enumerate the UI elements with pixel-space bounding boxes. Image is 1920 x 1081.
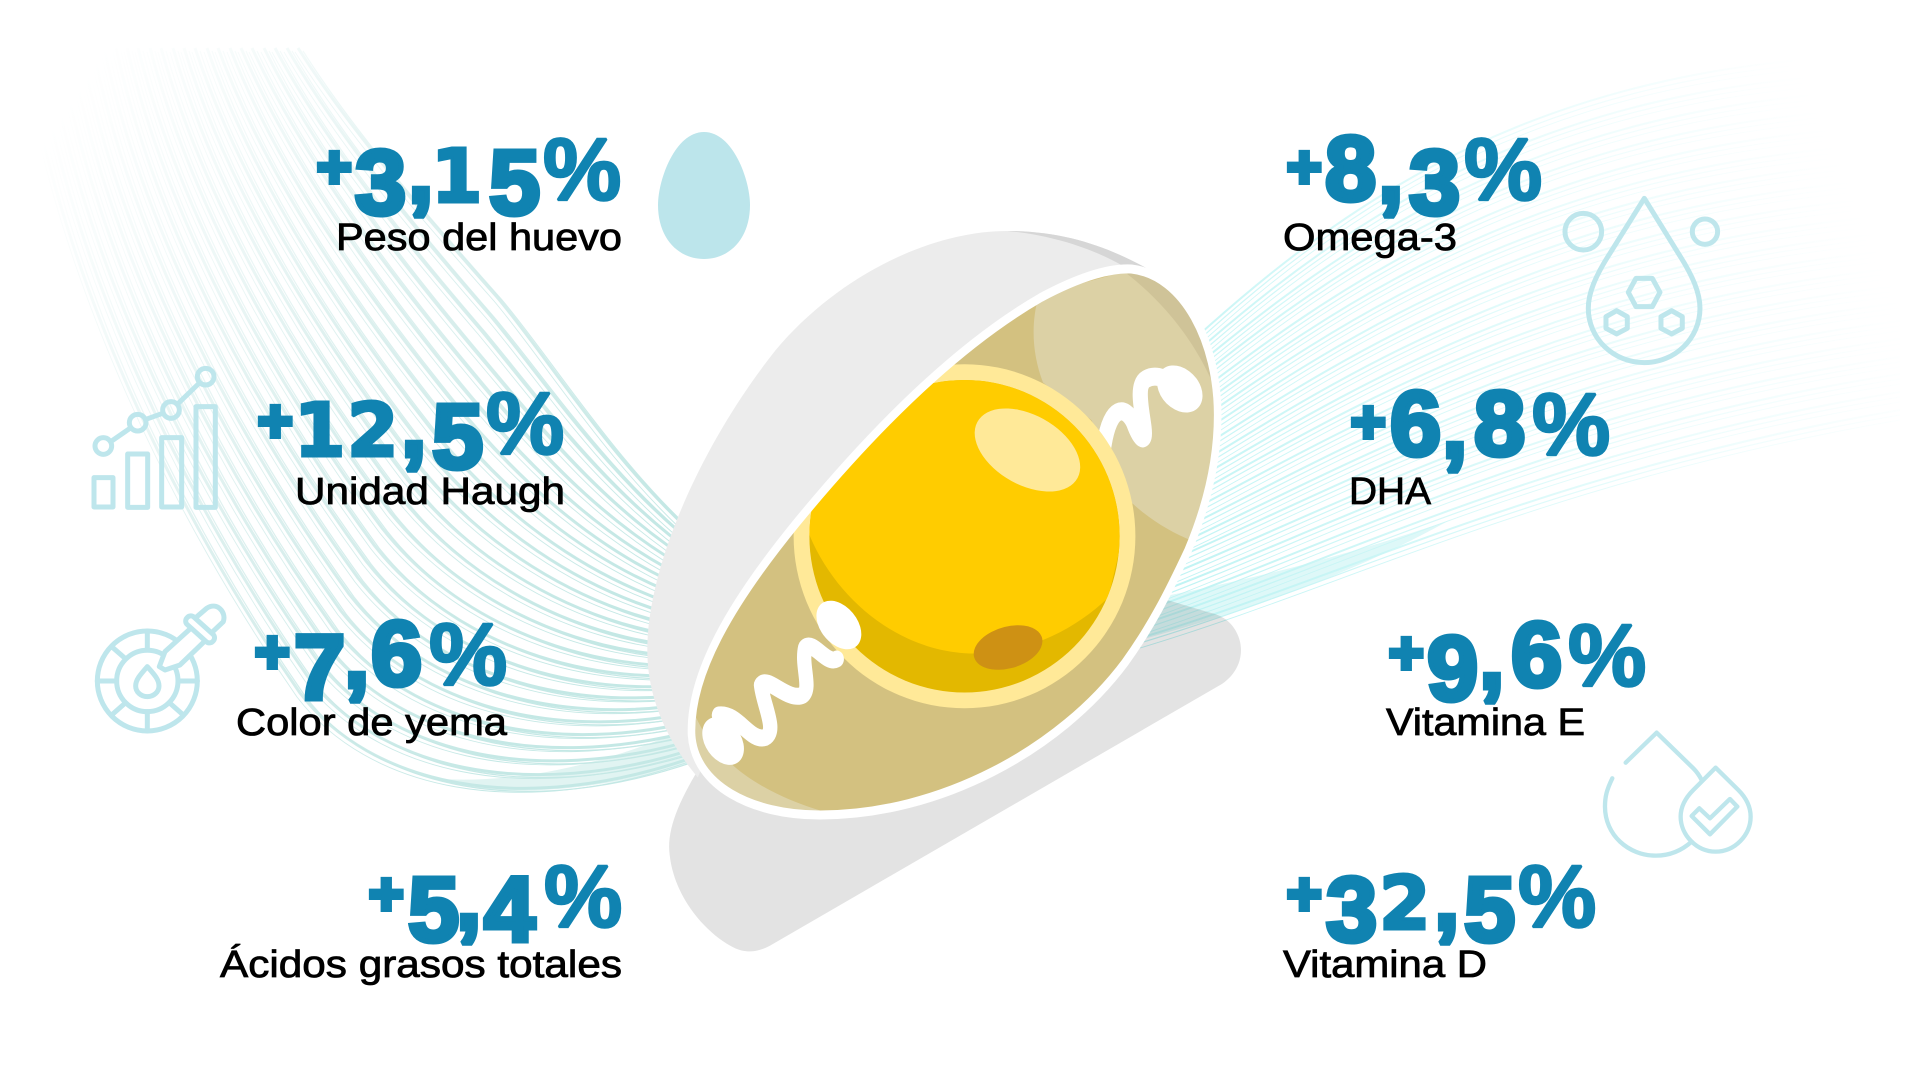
stat: yolk colour: , xyxy=(344,605,370,707)
stat: vitamin E: Vitamina E xyxy=(1386,702,1585,744)
stat: egg weight: Peso del huevo xyxy=(336,217,622,259)
stat: Haugh unit: 1 xyxy=(294,388,346,474)
stat: vitamin E: + xyxy=(1387,625,1426,679)
icon: double drop with check xyxy=(1605,733,1751,856)
stat: Haugh unit: % xyxy=(486,374,564,473)
stat: vitamin D: 3 xyxy=(1326,859,1377,961)
stat: Haugh unit xyxy=(256,374,565,513)
stat: vitamin E: 9 xyxy=(1427,618,1478,720)
stat: Haugh unit: 2 xyxy=(347,388,398,474)
stat: egg weight: , xyxy=(408,120,434,222)
yolk highlight xyxy=(974,408,1080,492)
stat: DHA: DHA xyxy=(1349,471,1432,513)
egg shell back xyxy=(647,231,1163,778)
stat: yolk colour: + xyxy=(253,624,292,678)
stat: egg weight: % xyxy=(543,120,621,219)
stat: vitamin D: 5 xyxy=(1464,859,1515,961)
stat: vitamin D: , xyxy=(1434,847,1460,949)
stat: vitamin E xyxy=(1386,604,1646,744)
stat: omega-3: % xyxy=(1464,120,1542,219)
stat: yolk colour: 6 xyxy=(371,603,422,705)
chalaza: upper right xyxy=(1104,356,1210,445)
stat: omega-3 xyxy=(1283,118,1542,259)
icon: egg xyxy=(658,132,750,259)
stat: vitamin D xyxy=(1283,847,1596,986)
stat: egg weight: + xyxy=(315,139,354,193)
stat: yolk colour: 7 xyxy=(294,617,345,719)
stat: vitamin D: 2 xyxy=(1379,861,1430,947)
shell dark crescent xyxy=(1007,231,1163,278)
stat: DHA: , xyxy=(1442,375,1468,477)
stat: Haugh unit: 5 xyxy=(432,386,483,488)
stat: egg weight xyxy=(315,120,622,259)
yolk membrane ring xyxy=(794,364,1135,708)
chalaza: lower left xyxy=(694,591,869,775)
stat: omega-3: + xyxy=(1285,139,1324,193)
stat: DHA: + xyxy=(1349,394,1388,448)
stat: Haugh unit: + xyxy=(256,393,295,447)
wave lines: right fan xyxy=(1140,55,1900,648)
stat: omega-3: , xyxy=(1378,120,1404,222)
stat: DHA xyxy=(1349,373,1610,513)
germinal spot xyxy=(974,625,1042,670)
stat: vitamin D: Vitamina D xyxy=(1283,944,1487,986)
stat: vitamin D: + xyxy=(1285,866,1324,920)
stat: total fatty acids: + xyxy=(367,866,406,920)
stat: vitamin E: 6 xyxy=(1511,604,1562,706)
egg white light areas xyxy=(683,260,1226,830)
stat: Haugh unit: Unidad Haugh xyxy=(295,471,565,513)
stat: DHA: % xyxy=(1532,375,1610,474)
stat: omega-3: 3 xyxy=(1409,132,1460,234)
wave lines: left fan xyxy=(22,48,705,792)
icon: oil drop with molecules xyxy=(1565,198,1718,363)
stat: total fatty acids: 5 xyxy=(408,859,459,961)
stat: omega-3: 8 xyxy=(1325,118,1376,220)
infographic canvas xyxy=(80,48,1830,986)
icon: colour wheel with pipette xyxy=(97,606,224,731)
stat: total fatty acids: 4 xyxy=(484,859,535,961)
stat: egg weight: 1 xyxy=(431,134,482,220)
stat: total fatty acids xyxy=(220,847,622,986)
icon: bar chart xyxy=(94,368,215,507)
stat: DHA: 8 xyxy=(1474,373,1525,475)
stat: vitamin E: % xyxy=(1568,606,1646,705)
illustration: cut egg xyxy=(647,231,1241,951)
stat: omega-3: Omega-3 xyxy=(1283,217,1457,259)
stat: DHA: 6 xyxy=(1390,373,1441,475)
stat: total fatty acids: % xyxy=(544,847,622,946)
stat: vitamin D: % xyxy=(1518,847,1596,946)
egg white cut face xyxy=(691,269,1218,815)
stat: total fatty acids: Ácidos grasos totales xyxy=(220,943,622,986)
stat: egg weight: 5 xyxy=(489,132,540,234)
yolk bright area xyxy=(810,380,1120,654)
stat: Haugh unit: , xyxy=(401,374,427,476)
yolk shaded base xyxy=(809,380,1120,692)
yolk group xyxy=(794,364,1136,708)
stat: yolk colour: Color de yema xyxy=(236,702,508,744)
stat: yolk colour xyxy=(236,603,508,744)
stat: yolk colour: % xyxy=(429,605,507,704)
egg cast shadow xyxy=(669,600,1241,951)
stat: egg weight: 3 xyxy=(355,132,406,234)
stat: total fatty acids: , xyxy=(456,847,482,949)
stat: vitamin E: , xyxy=(1479,606,1505,708)
egg white rim xyxy=(691,269,1218,815)
